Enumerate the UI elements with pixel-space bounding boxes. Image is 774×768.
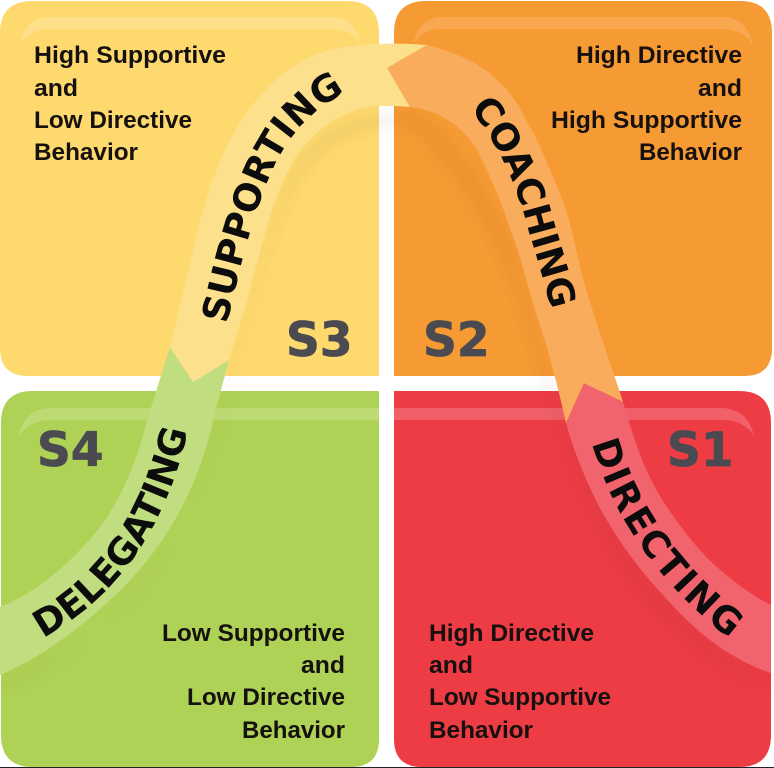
arrow band: directing — [566, 383, 771, 673]
band label: delegating: DELEGATING — [32, 428, 186, 637]
text block: S1 behavior: Low Supportive — [429, 684, 611, 711]
text block: S2 behavior: High Supportive — [551, 107, 742, 134]
label: S2: S2 — [423, 313, 490, 368]
text block: S2 behavior: and — [698, 75, 742, 102]
band label: supporting: SUPPORTING — [202, 72, 342, 321]
text block: S1 behavior: and — [429, 652, 473, 679]
text block: S2 behavior: Behavior — [639, 139, 742, 166]
text block: S1 behavior: Behavior — [429, 717, 533, 744]
panel: S2 coaching quadrant — [394, 1, 772, 376]
text block: S3 behavior: Low Directive — [34, 107, 192, 134]
text block: S2 behavior — [551, 42, 742, 166]
text block: S4 behavior: Low Supportive — [162, 620, 345, 647]
text block: S3 behavior — [34, 42, 226, 166]
arrow band: coaching — [387, 45, 623, 423]
arrow band: supporting — [170, 44, 427, 382]
arrow band: delegating — [0, 347, 229, 675]
panel: S3 supporting quadrant — [0, 1, 379, 376]
text block: S4 behavior: Behavior — [242, 717, 345, 744]
band shadows — [0, 112, 771, 690]
text block: S2 behavior: High Directive — [576, 42, 742, 69]
panel: S1 directing quadrant — [394, 391, 771, 767]
text block: S4 behavior: and — [301, 652, 345, 679]
text block: S1 behavior: High Directive — [429, 620, 594, 647]
band label: directing: DIRECTING — [592, 438, 743, 636]
band label: coaching: COACHING — [476, 98, 576, 307]
label: S4: S4 — [37, 423, 104, 478]
text block: S4 behavior: Low Directive — [187, 684, 345, 711]
text block: S3 behavior: High Supportive — [34, 42, 226, 69]
text block: S3 behavior: and — [34, 75, 78, 102]
text block: S4 behavior — [162, 620, 345, 744]
panel: S4 delegating quadrant — [1, 391, 379, 767]
text block: S3 behavior: Behavior — [34, 139, 138, 166]
text block: S1 behavior — [429, 620, 611, 744]
label: S1: S1 — [667, 423, 734, 478]
label: S3: S3 — [286, 313, 353, 368]
